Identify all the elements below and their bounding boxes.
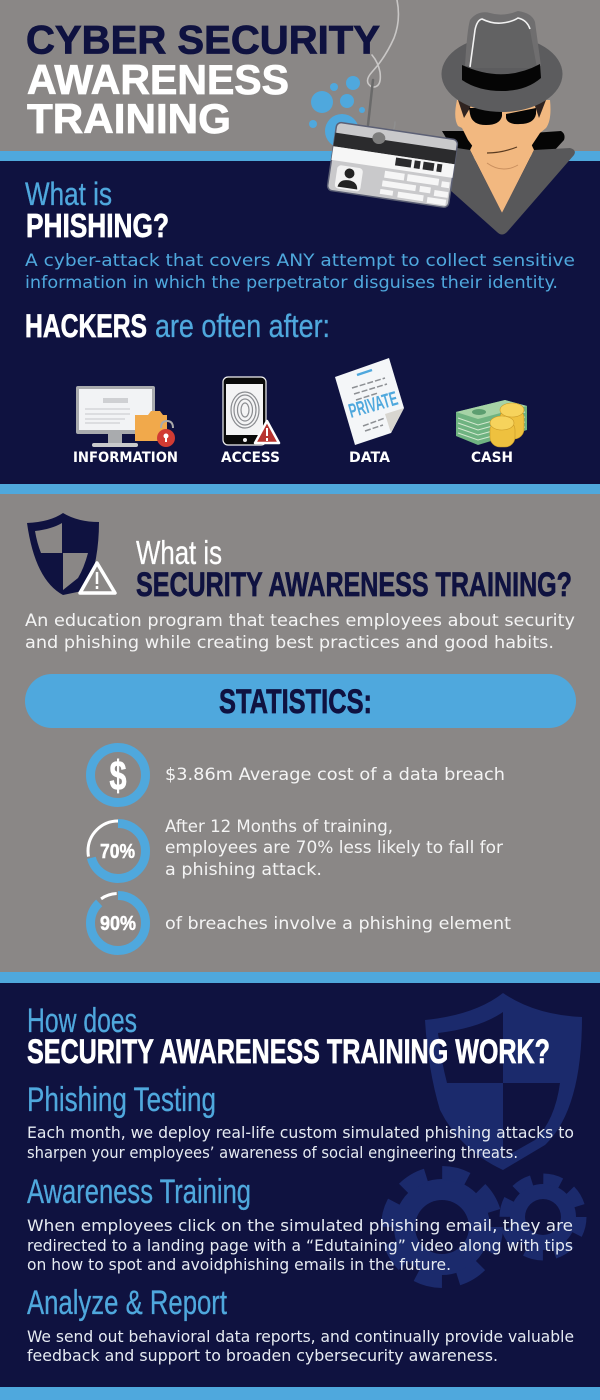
illustration: hacker in hat bbox=[442, 11, 575, 234]
section: analyze and report: feedback and support to broaden cybersecurity awareness. bbox=[27, 1346, 498, 1365]
stat: 70 percent less likely: a phishing attack. bbox=[165, 860, 322, 879]
text block: training definition: An education program that teaches employees about security bbox=[25, 611, 575, 630]
stat: cost of data breach: $3.86m Average cost of a data breach bbox=[165, 765, 505, 784]
title bbox=[26, 18, 380, 142]
stat: 70 percent less likely: 70% bbox=[100, 841, 135, 863]
icon: access: ACCESS bbox=[221, 450, 280, 466]
icon: data private document bbox=[335, 358, 404, 466]
statistics banner bbox=[25, 674, 576, 728]
icon: information bbox=[73, 386, 178, 466]
stat: 70 percent less likely: employees are 70% less likely to fall for bbox=[165, 838, 503, 857]
stat: 70 percent less likely bbox=[88, 817, 503, 881]
icon: access bbox=[221, 377, 280, 466]
text block: phishing definition: A cyber-attack that covers ANY attempt to collect sensitive bbox=[25, 251, 575, 271]
heading: what is security awareness training bbox=[136, 534, 572, 604]
heading: hackers are often after: are often after: bbox=[155, 308, 330, 344]
heading: what is phishing: What is bbox=[25, 176, 112, 212]
icon: data private document: DATA bbox=[349, 450, 391, 466]
stat: 90 percent of breaches bbox=[77, 882, 512, 964]
icon: data private document: PRIVATE bbox=[346, 388, 400, 423]
illustration: fishing hook and line bbox=[368, 0, 398, 138]
icon: cash bbox=[456, 400, 527, 466]
heading: what is phishing bbox=[25, 176, 169, 244]
statistics banner: STATISTICS: bbox=[219, 683, 372, 721]
text block: phishing definition: information in which the perpetrator disguises their identity. bbox=[25, 273, 558, 293]
title: CYBER SECURITY bbox=[26, 18, 380, 62]
heading: what is security awareness training: What is bbox=[136, 534, 222, 571]
section: awareness training bbox=[27, 1173, 573, 1274]
heading: how does training work: How does bbox=[27, 1002, 137, 1040]
heading: hackers are often after bbox=[25, 308, 330, 344]
watermark: shield bbox=[425, 993, 582, 1170]
text block: training definition bbox=[25, 611, 575, 652]
section: analyze and report: Analyze & Report bbox=[27, 1284, 227, 1322]
icon: shield with warning bbox=[27, 513, 115, 595]
section: analyze and report: We send out behavioral data reports, and continually provide valuable bbox=[27, 1327, 574, 1346]
text block: phishing definition bbox=[25, 251, 575, 293]
title: AWARENESS bbox=[27, 56, 289, 103]
heading: hackers are often after: HACKERS bbox=[25, 308, 147, 344]
icon: information: INFORMATION bbox=[73, 450, 178, 466]
section: awareness training: Awareness Training bbox=[27, 1173, 251, 1211]
section: analyze and report bbox=[27, 1284, 574, 1365]
section: phishing testing: Phishing Testing bbox=[27, 1081, 216, 1119]
illustration: ID card on hook bbox=[327, 122, 458, 208]
section: phishing testing: sharpen your employees’ awareness of social engineering threats. bbox=[27, 1143, 518, 1162]
stat: 90 percent of breaches: of breaches involve a phishing element bbox=[165, 914, 512, 933]
heading: what is phishing: PHISHING? bbox=[26, 207, 169, 244]
watermark: gears bbox=[388, 1173, 581, 1281]
stat: 90 percent of breaches: 90% bbox=[100, 913, 136, 935]
icon: blue bubbles bbox=[309, 76, 365, 148]
title: TRAINING bbox=[27, 95, 231, 142]
stat: cost of data breach: $ bbox=[110, 752, 126, 799]
stat: cost of data breach bbox=[90, 748, 505, 802]
section: phishing testing: Each month, we deploy real-life custom simulated phishing attacks to bbox=[27, 1123, 574, 1142]
icon: cash: CASH bbox=[471, 450, 513, 466]
text block: training definition: and phishing while creating best practices and good habits. bbox=[25, 633, 554, 652]
heading: how does training work bbox=[27, 1002, 550, 1071]
section: phishing testing bbox=[27, 1081, 574, 1162]
section: awareness training: When employees click on the simulated phishing email, they are bbox=[27, 1216, 573, 1235]
section: awareness training: redirected to a landing page with a “Edutaining” video along with tips bbox=[27, 1236, 573, 1255]
stat: 70 percent less likely: After 12 Months of training, bbox=[165, 817, 393, 836]
section: awareness training: on how to spot and avoidphishing emails in the future. bbox=[27, 1255, 451, 1274]
